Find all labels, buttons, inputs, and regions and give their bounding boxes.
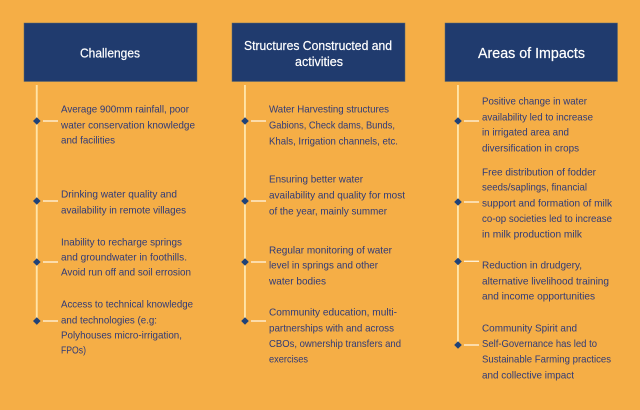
text: milk production impact: support and formation of milk bbox=[482, 198, 613, 210]
text: rainfall challenge: and facilities bbox=[61, 134, 115, 146]
timeline: impacts bbox=[454, 85, 479, 349]
text: community spirit impact: Community Spirit and bbox=[482, 322, 577, 334]
text: monitoring bbox=[268, 244, 392, 288]
heading: challenges bbox=[24, 23, 197, 82]
text: drinking water challenge bbox=[61, 188, 186, 216]
timeline: structures bbox=[241, 85, 266, 325]
text: community spirit impact: Self-Governance has led to bbox=[482, 338, 597, 350]
heading: challenges: Challenges bbox=[80, 46, 140, 60]
text: drinking water challenge: availability in remote villages bbox=[61, 204, 186, 216]
text: technical access challenge: Polyhouses micro-irrigation, bbox=[61, 330, 182, 342]
panel: challenges bbox=[24, 23, 197, 356]
text: monitoring: water bodies bbox=[268, 276, 326, 288]
text: water availability impact bbox=[482, 96, 593, 154]
text: water availability: of the year, mainly summer bbox=[269, 206, 387, 218]
text: water availability impact: availability led to increase bbox=[482, 112, 593, 124]
text: water availability bbox=[269, 174, 405, 218]
text: water availability impact: Positive change in water bbox=[482, 96, 587, 108]
heading: areas of impacts bbox=[445, 23, 618, 82]
text: recharge challenge: Inability to recharge springs bbox=[61, 236, 182, 248]
text: technical access challenge: and technologies (e.g: bbox=[61, 314, 157, 326]
text: drudgery impact: Reduction in drudgery, bbox=[482, 260, 582, 272]
text: technical access challenge: Access to technical knowledge bbox=[61, 298, 193, 310]
text: rainfall challenge: Average 900mm rainfall, poor bbox=[61, 104, 189, 116]
text: technical access challenge bbox=[61, 298, 193, 356]
text: water availability: Ensuring better water bbox=[269, 174, 363, 186]
text: technical access challenge: FPOs) bbox=[61, 344, 86, 356]
text: community spirit impact: and collective impact bbox=[482, 370, 574, 382]
text: water harvesting: Water Harvesting structures bbox=[269, 104, 389, 116]
text: milk production impact bbox=[482, 166, 613, 240]
text: milk production impact: co-op societies led to increase bbox=[482, 213, 612, 225]
text: community education: partnerships with and across bbox=[269, 322, 394, 334]
text: drudgery impact: alternative livelihood training bbox=[482, 276, 609, 288]
text: recharge challenge bbox=[61, 236, 191, 278]
text: rainfall challenge: water conservation knowledge bbox=[60, 120, 195, 132]
text: milk production impact: in milk production milk bbox=[482, 228, 583, 240]
heading: structures bbox=[232, 23, 405, 82]
text: community education bbox=[269, 306, 401, 366]
text: water harvesting bbox=[269, 104, 398, 148]
text: water harvesting: Khals, Irrigation channels, etc. bbox=[269, 136, 398, 148]
text: drinking water challenge: Drinking water quality and bbox=[61, 188, 177, 200]
panel: structures bbox=[232, 23, 405, 366]
text: milk production impact: Free distribution of fodder bbox=[482, 166, 596, 178]
text: community spirit impact: Sustainable Farming practices bbox=[482, 354, 611, 366]
text: community education: CBOs, ownership transfers and bbox=[269, 338, 401, 350]
text: community spirit impact bbox=[482, 322, 611, 382]
timeline: challenges bbox=[33, 85, 58, 325]
text: water availability impact: diversification in crops bbox=[482, 142, 579, 154]
text: recharge challenge: Avoid run off and soil errosion bbox=[61, 266, 191, 278]
text: monitoring: level in springs and other bbox=[269, 260, 378, 272]
text: water availability impact: in irrigated area and bbox=[482, 126, 569, 138]
heading: structures: activities bbox=[295, 54, 343, 69]
text: rainfall challenge bbox=[60, 104, 195, 146]
text: monitoring: Regular monitoring of water bbox=[269, 244, 392, 256]
text: water harvesting: Gabions, Check dams, Bunds, bbox=[269, 120, 395, 132]
heading: areas of impacts: Areas of Impacts bbox=[478, 45, 585, 62]
panel: areas of impacts bbox=[445, 23, 618, 382]
text: drudgery impact bbox=[482, 260, 609, 302]
text: drudgery impact: and income opportunities bbox=[482, 290, 595, 302]
text: recharge challenge: and groundwater in foothills. bbox=[61, 252, 187, 264]
text: milk production impact: seeds/saplings, financial bbox=[482, 182, 587, 194]
heading: structures: Structures Constructed and bbox=[244, 38, 392, 53]
text: water availability: availability and quality for most bbox=[269, 190, 405, 202]
text: community education: Community education, multi- bbox=[269, 306, 397, 318]
text: community education: exercises bbox=[269, 354, 308, 366]
